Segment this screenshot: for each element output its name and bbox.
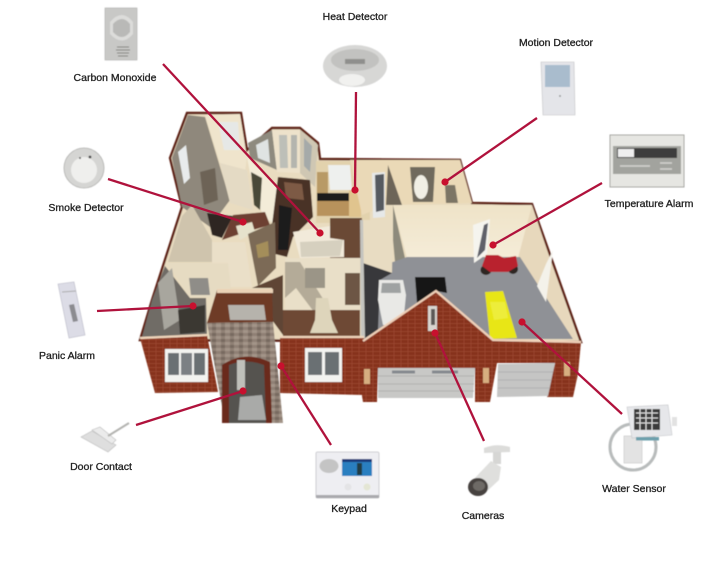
callout: temperature alarm <box>489 135 694 249</box>
bay window room <box>248 130 318 187</box>
callout: keypad <box>277 362 379 515</box>
arrow: temperature alarm <box>489 183 602 249</box>
arrow: water sensor <box>518 318 622 414</box>
callout: door contact <box>70 387 247 473</box>
icon: motion detector <box>541 62 575 115</box>
label: smoke detector: Smoke Detector <box>48 202 124 214</box>
icon: temperature alarm panel <box>610 135 684 187</box>
label: carbon monoxide: Carbon Monoxide <box>74 72 157 84</box>
left wing rooms <box>172 114 277 240</box>
arrow: keypad <box>277 362 331 445</box>
kitchen <box>316 161 370 258</box>
garage <box>360 205 577 340</box>
label: temperature alarm: Temperature Alarm <box>605 198 694 210</box>
house cutaway <box>140 113 581 423</box>
front brick walls <box>140 291 581 402</box>
callout: water sensor <box>518 318 677 495</box>
stone entry tower <box>207 289 283 423</box>
lower left rooms <box>142 205 283 337</box>
front windows <box>165 348 342 382</box>
arrow: heat detector <box>351 92 359 194</box>
icon: security camera <box>468 445 510 496</box>
label: door contact: Door Contact <box>70 461 132 473</box>
label: heat detector: Heat Detector <box>323 11 388 23</box>
arrow: cameras <box>431 329 484 441</box>
callout: carbon monoxide <box>74 8 324 237</box>
icon: door contact <box>81 423 129 452</box>
label: panic alarm: Panic Alarm <box>39 350 95 362</box>
icon: panic alarm <box>58 282 85 338</box>
garage window <box>473 219 490 263</box>
arrow: panic alarm <box>97 302 197 311</box>
arrow: carbon monoxide <box>163 64 324 237</box>
callout: heat detector <box>323 11 388 194</box>
icon: smoke detector <box>64 148 104 188</box>
callout: motion detector <box>441 37 594 186</box>
bedroom with bed <box>293 226 344 258</box>
icon: water sensor <box>610 405 677 470</box>
icon: heat detector <box>323 45 387 87</box>
arrow: motion detector <box>441 118 537 186</box>
arrow: smoke detector <box>108 179 247 226</box>
garage doors <box>378 363 555 398</box>
arrow: door contact <box>136 387 247 425</box>
label: keypad: Keypad <box>331 503 367 515</box>
label: cameras: Cameras <box>462 510 504 522</box>
house interior base and outer wall <box>140 113 581 342</box>
centre bathroom <box>283 258 360 337</box>
label: water sensor: Water Sensor <box>602 483 666 495</box>
callout: panic alarm <box>39 282 197 362</box>
cars and motorcycle <box>378 255 518 339</box>
back utility room <box>350 160 472 218</box>
label: motion detector: Motion Detector <box>519 37 594 49</box>
central stairwell <box>272 177 313 257</box>
icon: keypad <box>316 452 379 498</box>
icon: carbon monoxide detector <box>105 8 137 60</box>
callout: smoke detector <box>48 148 247 226</box>
callout: cameras <box>431 329 510 522</box>
